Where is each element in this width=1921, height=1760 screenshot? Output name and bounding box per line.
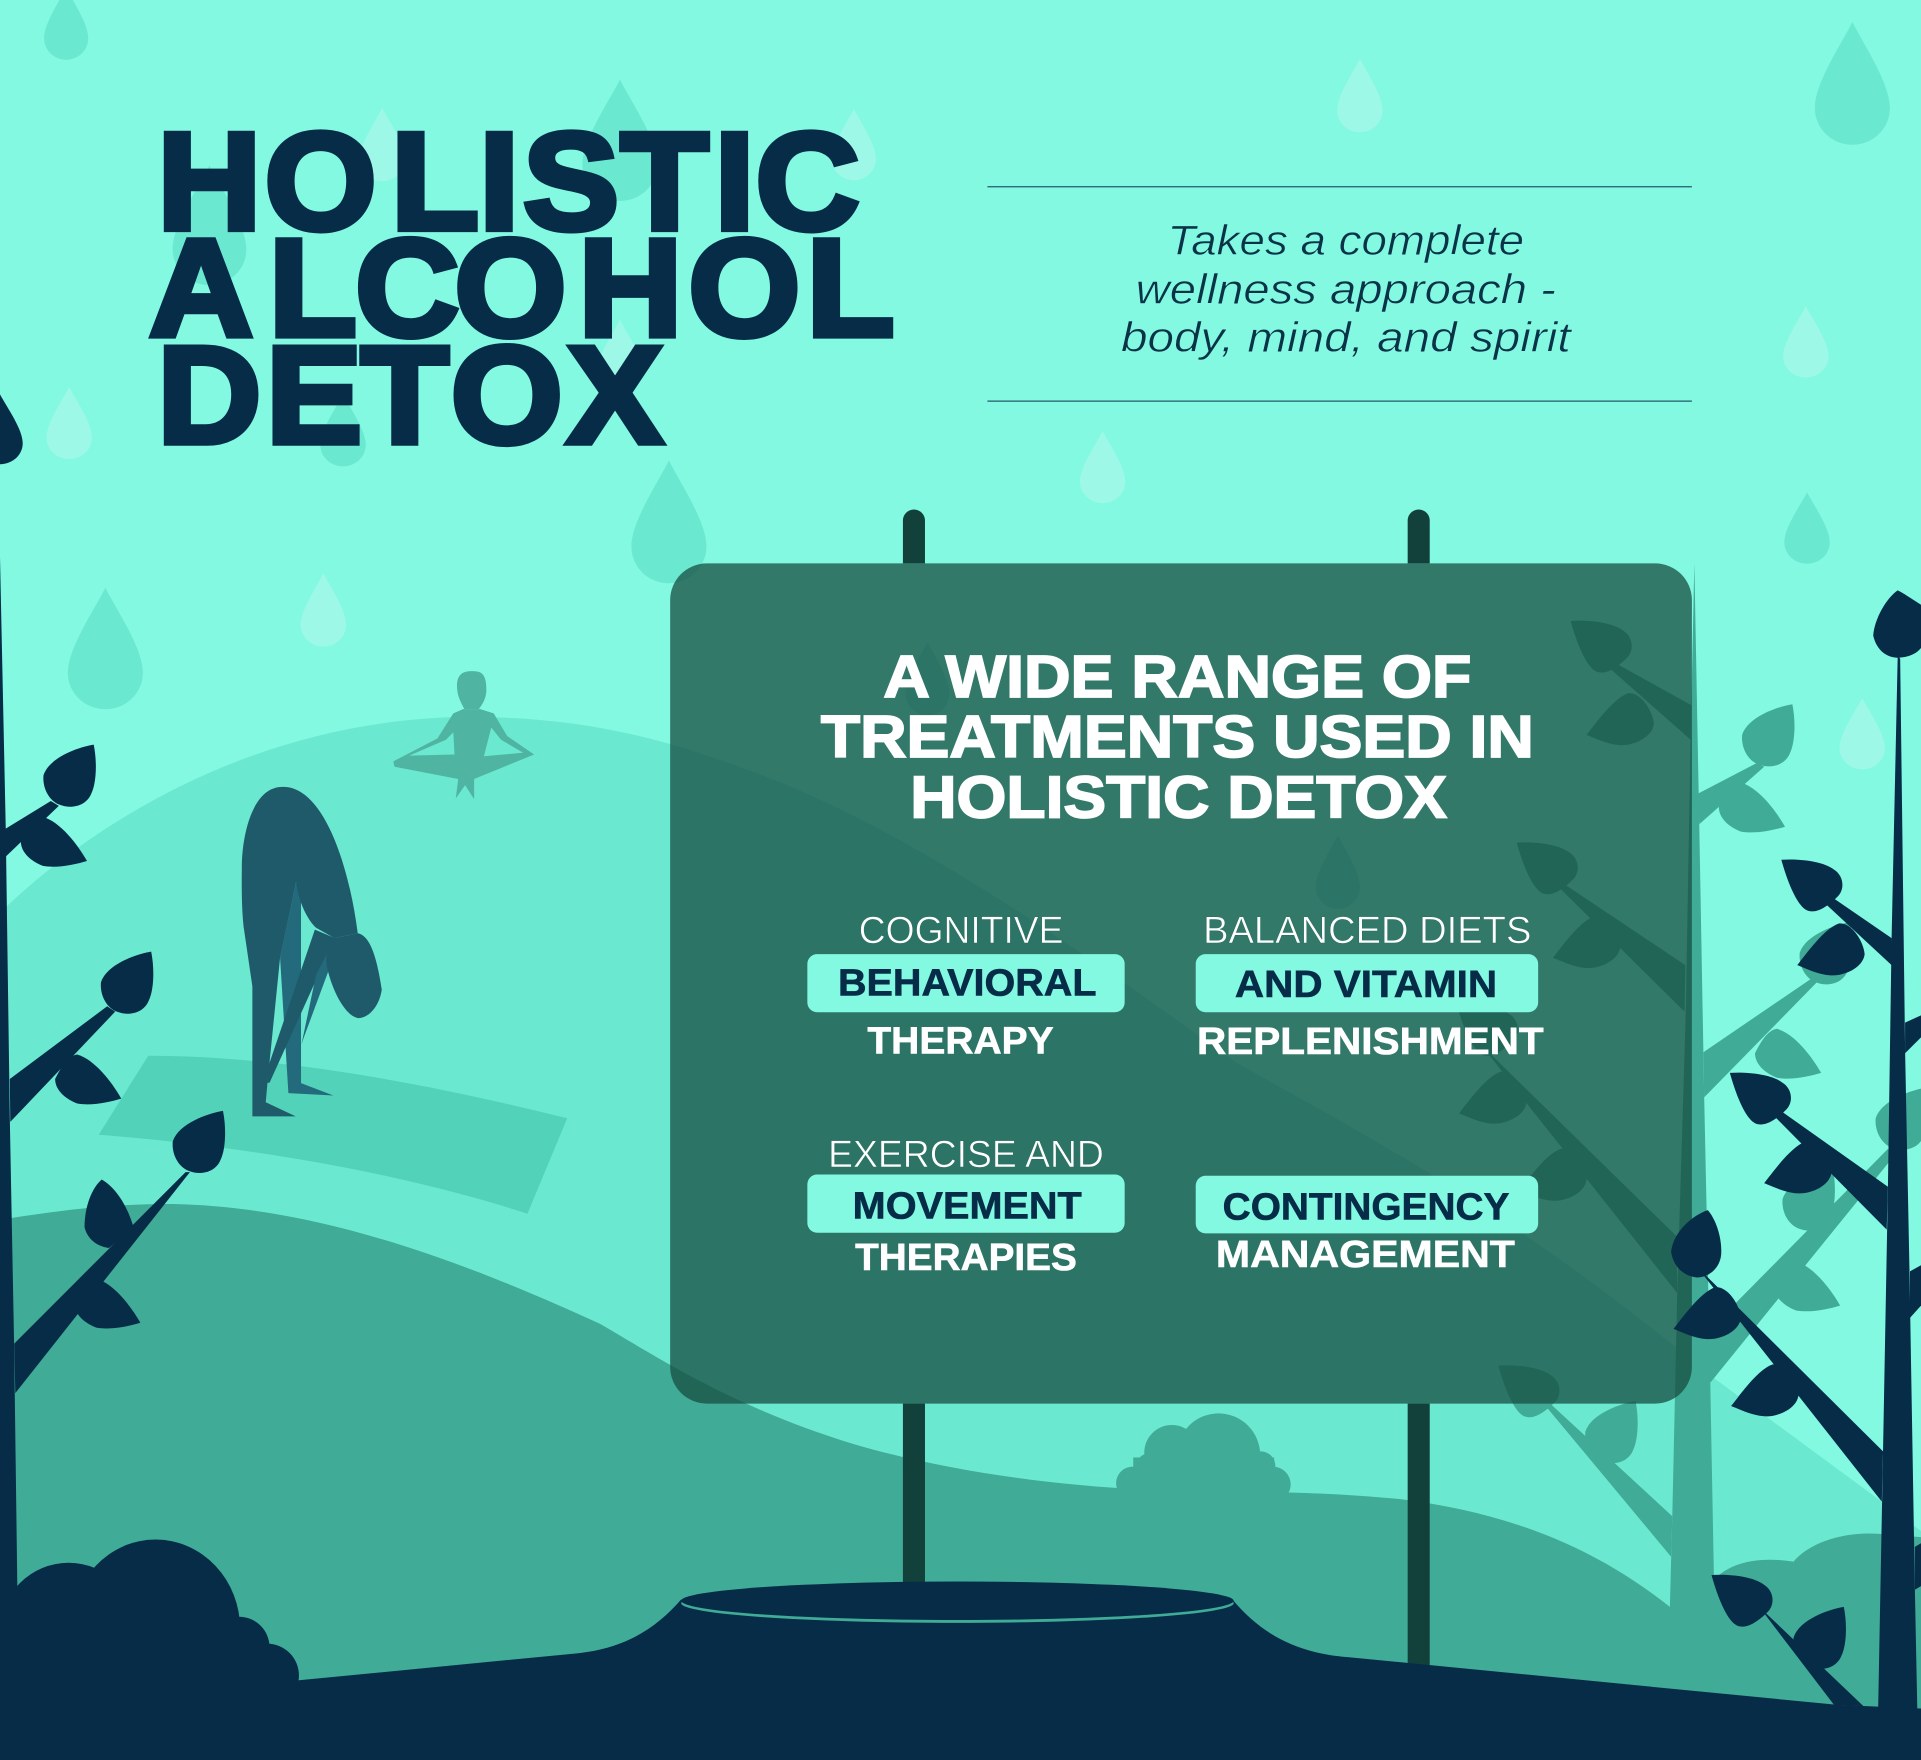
treatment: balanced diets: REPLENISHMENT <box>1197 1021 1544 1063</box>
tree: foreground left <box>0 557 225 1666</box>
hill: light back hill <box>0 717 1921 1760</box>
sign board <box>670 563 1692 1404</box>
tree: foreground right <box>1671 590 1921 1711</box>
treatment: cognitive behavioral therapy: COGNITIVE <box>859 910 1063 952</box>
hill: front green hill <box>0 1204 1921 1760</box>
title: DETOX <box>157 317 663 472</box>
subtitle: body, mind, and spirit <box>1121 314 1573 361</box>
title <box>149 104 894 472</box>
sign posts <box>903 510 1430 1673</box>
treatment: cognitive behavioral therapy: BEHAVIORAL <box>838 963 1096 1005</box>
ground <box>0 1600 1921 1760</box>
treatment: exercise and movement: THERAPIES <box>855 1237 1077 1279</box>
treatment: balanced diets <box>1196 910 1544 1063</box>
yoga mat <box>99 1056 567 1214</box>
treatment: exercise and movement <box>807 1134 1125 1279</box>
treatment: contingency management: MANAGEMENT <box>1216 1234 1515 1276</box>
treatment: balanced diets: BALANCED DIETS <box>1203 910 1531 952</box>
subtitle: Takes a complete <box>1168 217 1524 264</box>
sign heading: HOLISTIC DETOX <box>910 764 1447 831</box>
subtitle: wellness approach - <box>1136 266 1556 313</box>
treatment: contingency management: CONTINGENCY <box>1223 1186 1509 1228</box>
title: ALCOHOL <box>149 210 894 365</box>
treatment: balanced diets: AND VITAMIN <box>1235 964 1497 1006</box>
title: HOLISTIC <box>157 104 860 258</box>
treatment: cognitive behavioral therapy <box>807 910 1125 1062</box>
subtitle <box>987 187 1692 401</box>
treatment: exercise and movement: MOVEMENT <box>853 1186 1082 1228</box>
bush: mid hill <box>1116 1413 1291 1502</box>
treatment: contingency management <box>1196 1176 1538 1276</box>
sign heading <box>821 643 1534 831</box>
sign heading: A WIDE RANGE OF <box>883 643 1471 710</box>
figure: forward fold <box>242 787 382 1116</box>
background tree <box>1457 563 1921 1641</box>
figure: meditating <box>393 671 534 799</box>
treatment: exercise and movement: EXERCISE AND <box>828 1134 1104 1176</box>
treatment: cognitive behavioral therapy: THERAPY <box>867 1020 1054 1062</box>
bush: foreground left <box>0 1540 299 1718</box>
platform <box>681 1582 1234 1623</box>
sign heading: TREATMENTS USED IN <box>821 703 1534 770</box>
raindrops <box>0 0 1890 909</box>
